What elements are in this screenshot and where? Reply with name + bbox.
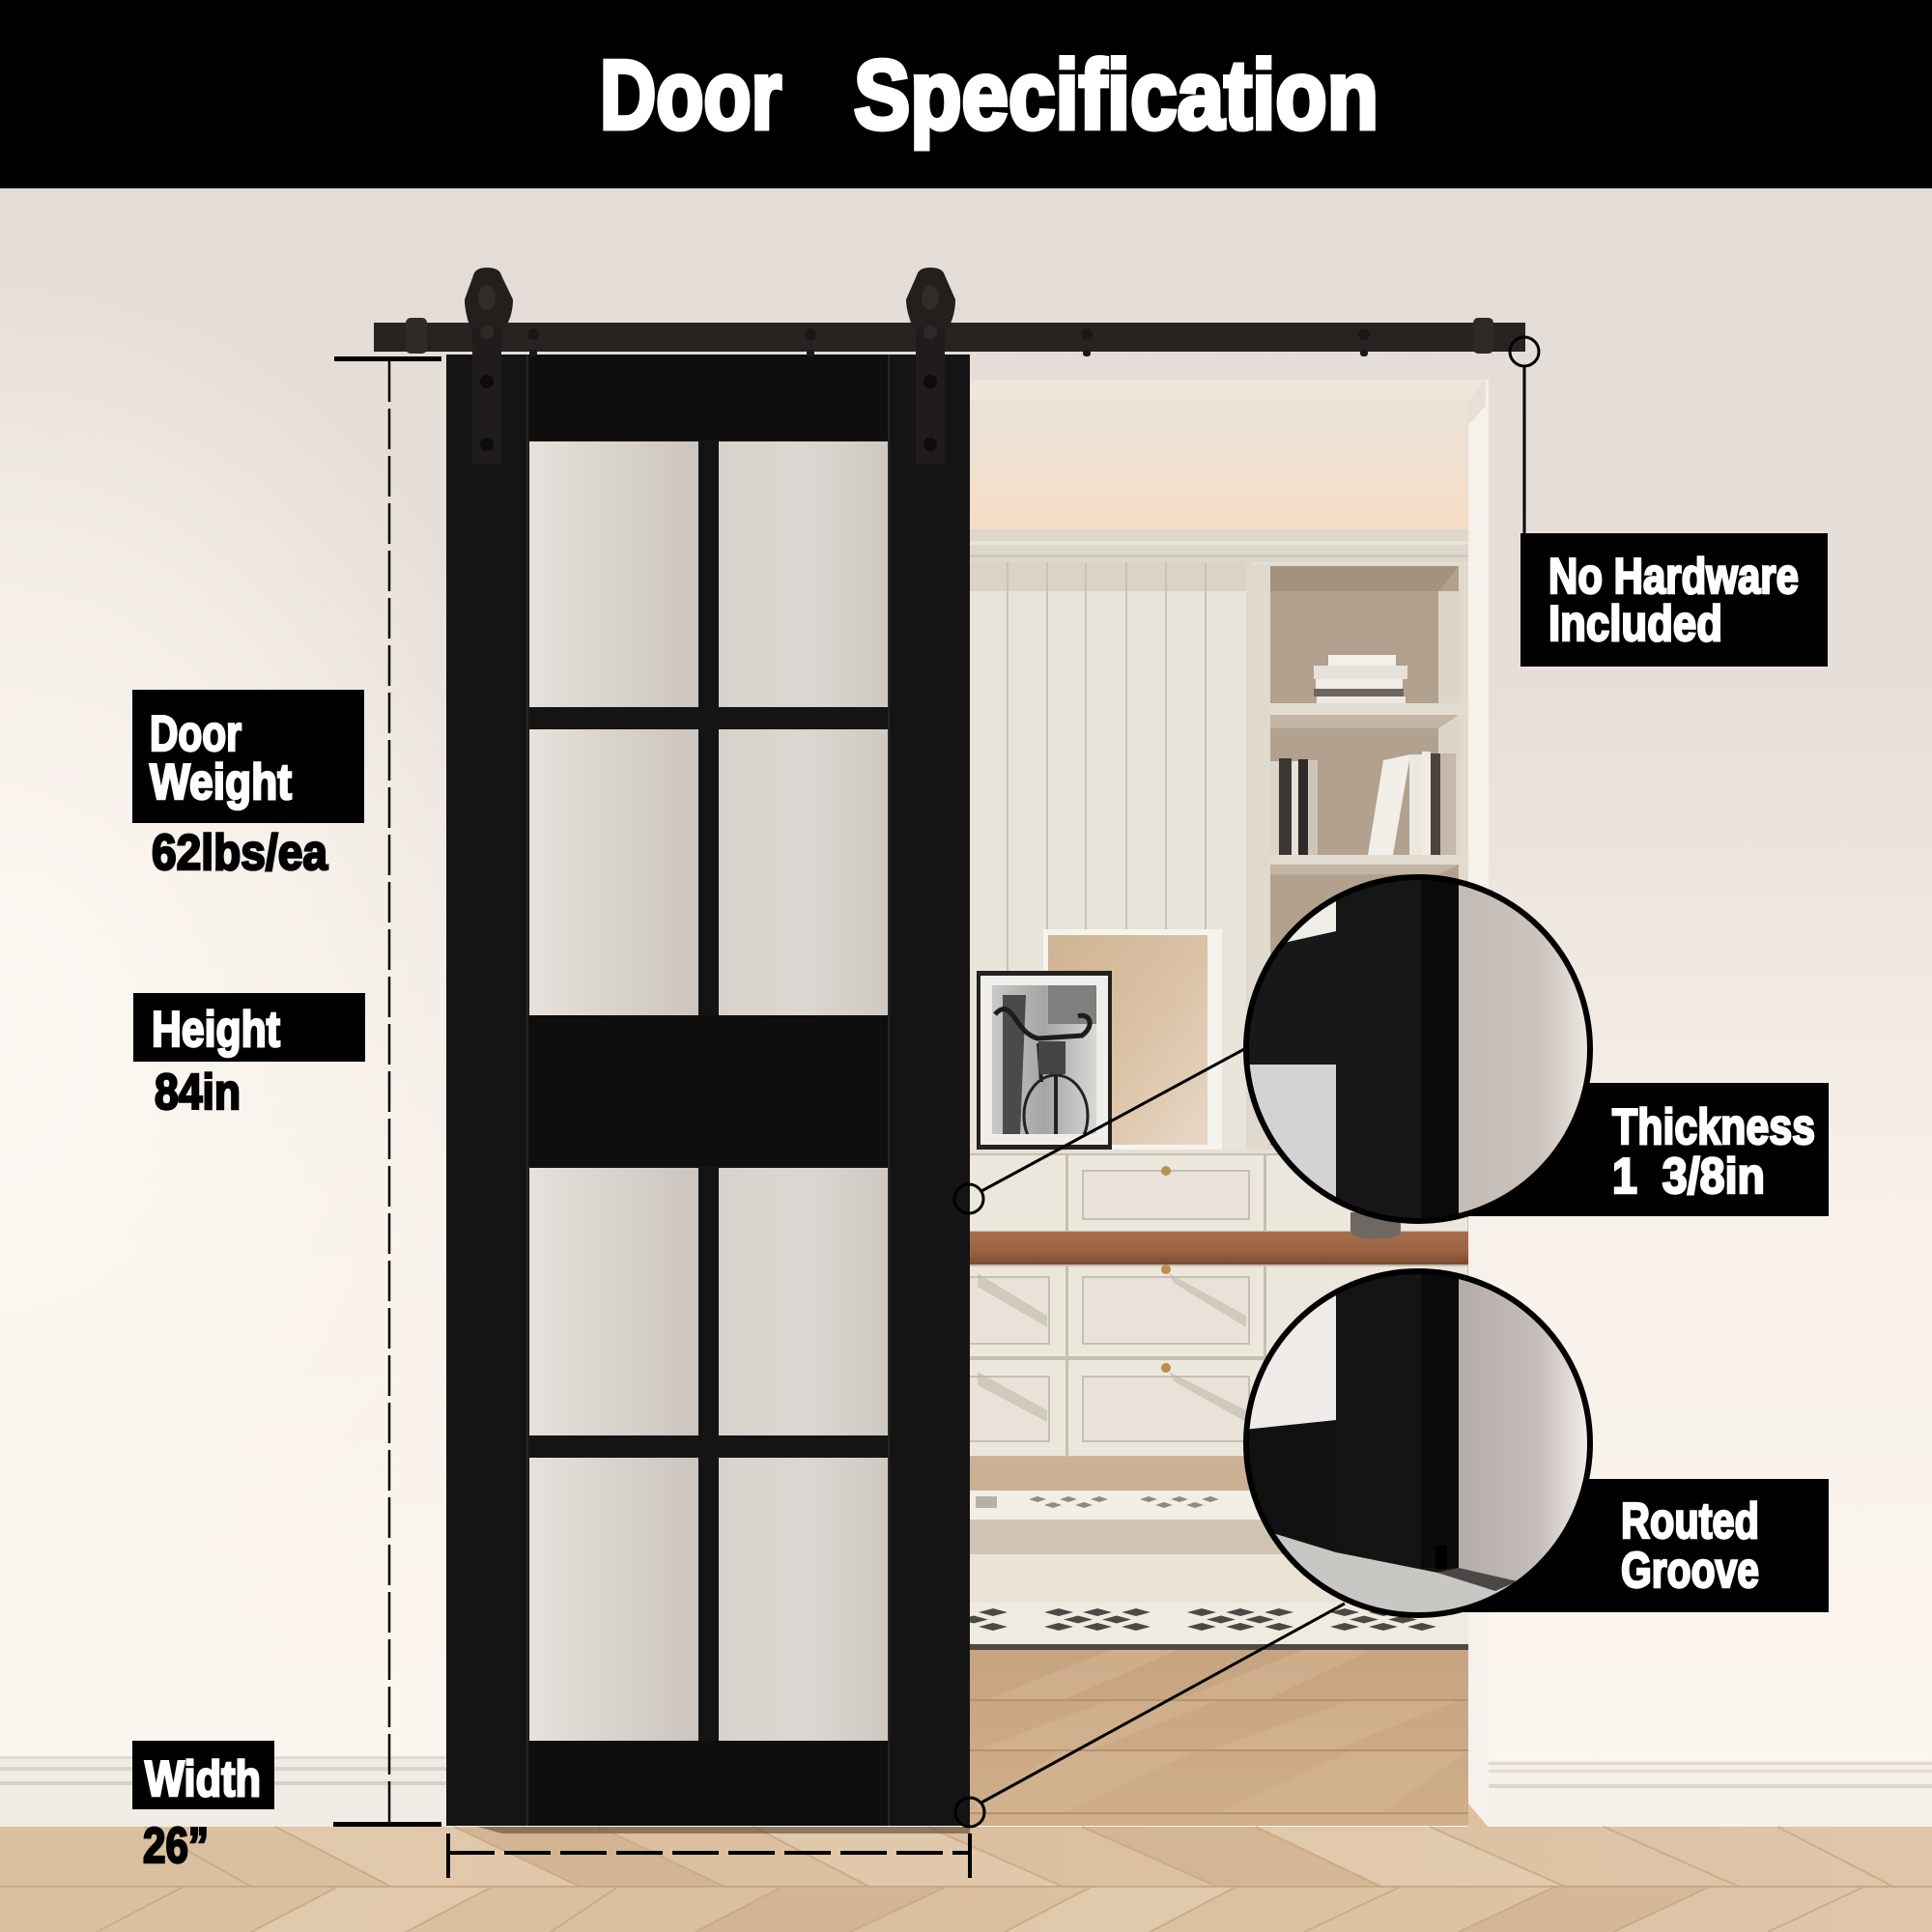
baseboard xyxy=(0,1756,1932,1828)
label: door weight xyxy=(132,690,364,823)
detail circle: routed groove xyxy=(1244,1270,1594,1623)
vase on counter xyxy=(1350,1212,1401,1238)
rail bolts xyxy=(527,328,1370,356)
bicycle photo xyxy=(977,971,1112,1156)
detail circle: thickness xyxy=(1244,875,1594,1224)
label: door weight: Weight xyxy=(150,754,292,810)
rails xyxy=(528,355,889,1826)
beige art print xyxy=(1043,929,1222,1150)
width dimension line xyxy=(448,1833,970,1878)
crown moulding xyxy=(970,529,1468,562)
value: door weight: 62lbs/ea xyxy=(152,825,328,881)
cabinet shadows xyxy=(978,1273,1246,1422)
frosted glass panes xyxy=(529,441,888,1741)
brass knobs xyxy=(1161,1166,1171,1373)
callout pointer: thickness xyxy=(954,1048,1246,1213)
bookcase xyxy=(1246,564,1468,1153)
right hanger xyxy=(906,268,955,465)
wooden counter xyxy=(970,1232,1468,1264)
callout: no hardware: No Hardware xyxy=(1548,549,1799,605)
callout pointer: routed groove xyxy=(955,1604,1345,1827)
title: Specification xyxy=(854,42,1378,150)
books on shelf one xyxy=(1314,655,1407,703)
label: door weight: Door xyxy=(150,706,242,762)
value: height: 84in xyxy=(155,1065,241,1121)
value: width: 26” xyxy=(143,1818,209,1874)
label box: thickness: Thickness xyxy=(1612,1099,1815,1155)
title: Door xyxy=(600,42,781,150)
books on shelf two xyxy=(1270,752,1456,855)
cabinets xyxy=(969,1154,1468,1457)
header bar xyxy=(0,0,1932,188)
barn door track rail xyxy=(374,318,1525,356)
panelled wall xyxy=(970,562,1250,1153)
callout: no hardware xyxy=(1510,337,1828,667)
counter base xyxy=(1007,1150,1207,1153)
room floor strip xyxy=(970,1457,1250,1491)
door frame xyxy=(446,355,970,1826)
label box: routed groove xyxy=(1449,1479,1829,1612)
rug xyxy=(970,1491,1468,1650)
label box: routed groove: Groove xyxy=(1621,1543,1759,1599)
label: width: Width xyxy=(145,1751,261,1807)
barn door xyxy=(446,355,970,1826)
ceiling xyxy=(970,439,1468,529)
label box: thickness: 1 3/8in xyxy=(1612,1149,1765,1205)
callout: no hardware: Included xyxy=(1548,596,1722,652)
label box: thickness xyxy=(1449,1083,1829,1216)
doorway trim xyxy=(970,380,1489,1828)
label: height xyxy=(133,993,365,1062)
label box: routed groove: Routed xyxy=(1621,1493,1759,1549)
label: height: Height xyxy=(152,1002,280,1058)
room wood floor xyxy=(966,1650,1468,1826)
track stops xyxy=(406,318,427,354)
wood floor xyxy=(0,1827,1932,1932)
room through doorway xyxy=(966,401,1468,1826)
title xyxy=(600,42,1378,150)
shelves xyxy=(1270,703,1468,874)
height dimension line xyxy=(333,356,441,1827)
door shadow on floor xyxy=(477,1827,970,1833)
left hanger xyxy=(465,268,513,465)
